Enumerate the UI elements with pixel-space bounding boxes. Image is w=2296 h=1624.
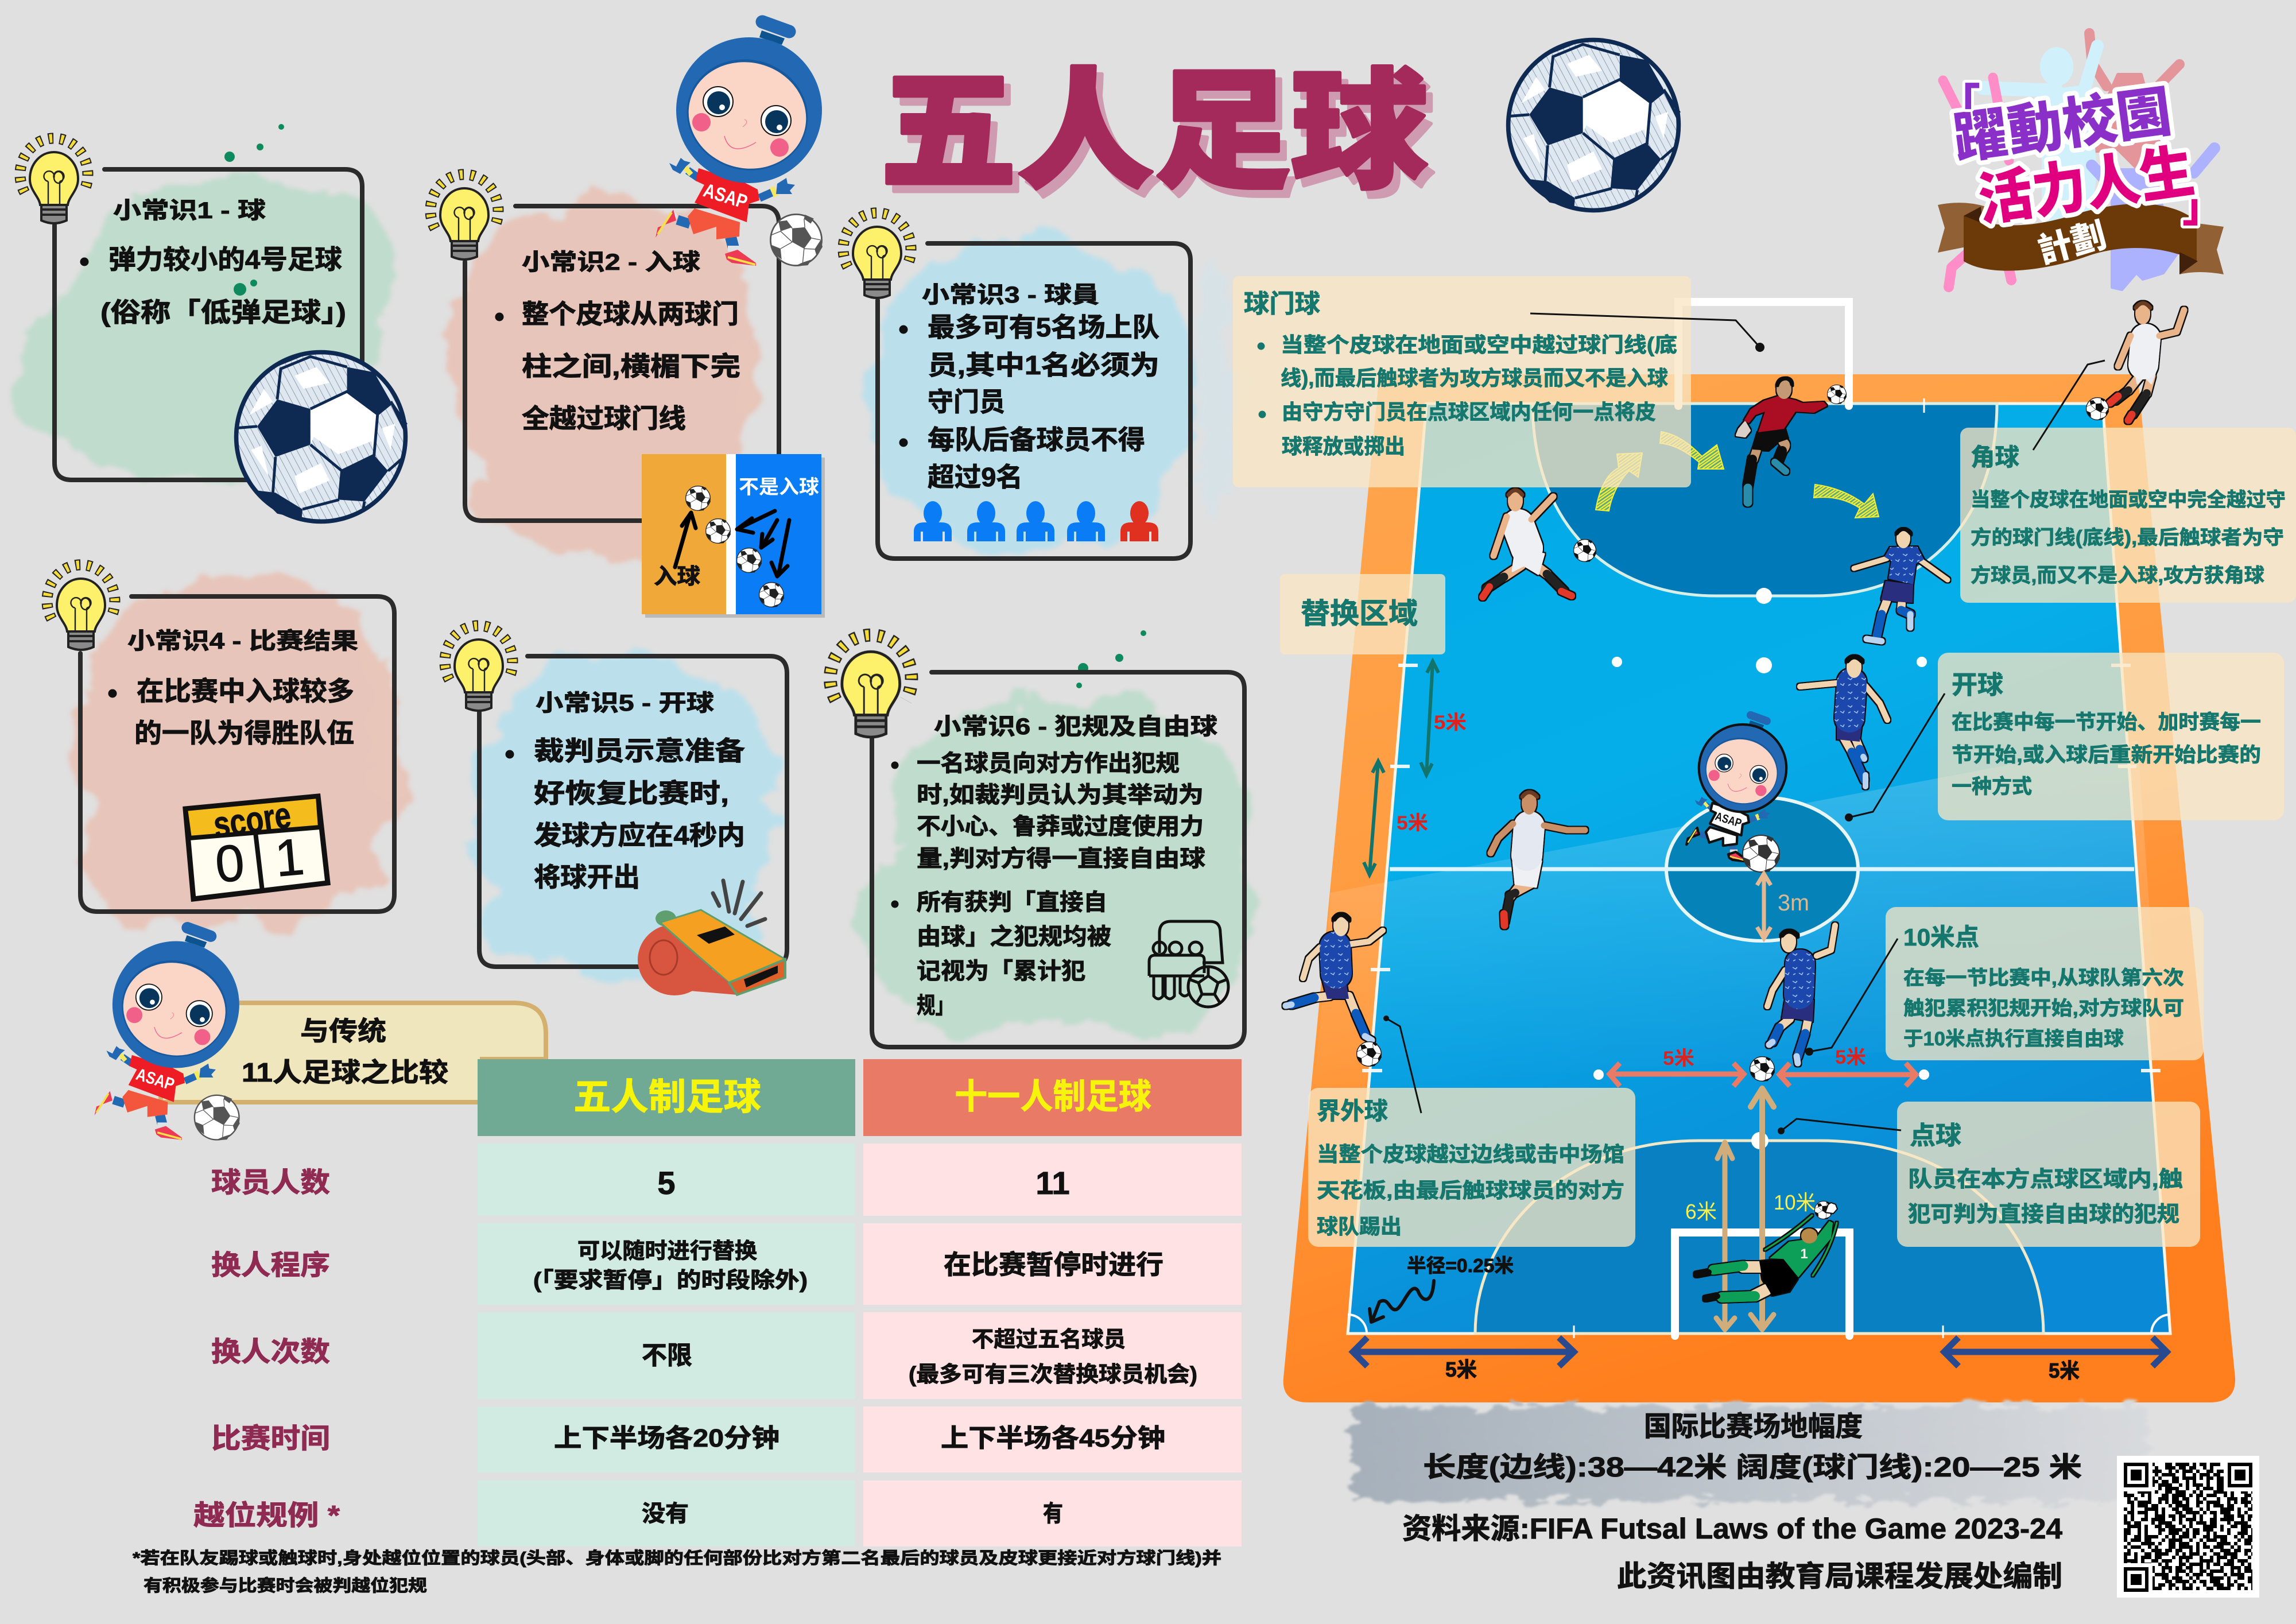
run-off surround [1283, 374, 2235, 1402]
bullet text: 好恢复比赛时, [534, 778, 729, 808]
comparison table [193, 1059, 1242, 1547]
leader line [1805, 939, 1898, 1056]
body text: 球释放或掷出 [1282, 435, 1405, 458]
icon: ball [770, 214, 823, 266]
player: white kit upper left [1483, 490, 1572, 597]
row: substitution procedure: 可以随时进行替换 [577, 1239, 757, 1263]
label: 3m: 3m [1778, 890, 1809, 916]
panel: goal kick [1233, 276, 1764, 487]
leader line [1530, 313, 1764, 352]
bullet text [899, 312, 1159, 492]
plan label: 計劃 [2034, 216, 2110, 270]
heading: 球门球 [1244, 290, 1320, 318]
body text [1258, 333, 1677, 458]
labels: 5 m zones [1397, 712, 1866, 1069]
source and credit: 资料来源:FIFA Futsal Laws of the Game 2023-24 [1402, 1513, 2062, 1545]
icon: light bulb [430, 175, 498, 259]
bullet text: 发球方应在4秒内 [534, 820, 745, 850]
bullet text: 在比赛中入球较多 [137, 676, 354, 706]
row: match time [211, 1406, 1242, 1472]
bullet text: (俗称「低弹足球」) [100, 297, 346, 327]
bullet text: 每队后备球员不得 [928, 425, 1145, 455]
programme name: 」 [2182, 185, 2224, 231]
arrows: 5 m base [1353, 1338, 2167, 1366]
icon: light bulb [830, 635, 912, 737]
pitch dimensions: 国际比赛场地幅度 [1644, 1412, 1863, 1442]
panel: penalty kick [1778, 1102, 2200, 1247]
player: blue kit left touchline [1286, 914, 1383, 1040]
bullet text: 整个皮球从两球门 [522, 299, 739, 329]
row: match time: 上下半场各20分钟 [554, 1424, 779, 1452]
body text [1317, 1142, 1624, 1238]
footnote: *若在队友踢球或触球时,身处越位位置的球员(头部、身体或脚的任何部份比对方第二名最后的球员及皮球更接近对方球门线)并 [133, 1549, 1221, 1568]
mascot: top: ASAP [701, 179, 750, 214]
icon: ball [1827, 385, 1847, 404]
panel: 小常识6 犯规及自由球 [830, 635, 1244, 1047]
heading: 角球 [1971, 444, 2019, 471]
icon: free kick wall [1149, 921, 1228, 1007]
panel: 小常识4 比赛结果 [47, 565, 394, 912]
icon: scoreboard [185, 794, 328, 899]
heading: 小常识6 - 犯规及自由球 [934, 714, 1217, 739]
leader line [1845, 693, 1945, 821]
row: substitution count [211, 1312, 1242, 1399]
body text: 犯可判为直接自由球的犯规 [1908, 1203, 2179, 1227]
leader line [1778, 1119, 1901, 1134]
body text [1952, 711, 2261, 798]
icon: ball [1814, 1201, 1833, 1219]
futsal pitch [1283, 302, 2235, 1402]
mascot: centre circle: ASAP [1713, 810, 1743, 830]
footnote [133, 1549, 1221, 1595]
icon: scoreboard: score [211, 794, 293, 846]
arrow: 3m [1757, 874, 1771, 939]
centre circle [1666, 797, 1858, 941]
icon: football [235, 351, 406, 522]
panel: corner kick [1960, 361, 2296, 603]
labels: 5 m base [1445, 1358, 2080, 1382]
row: substitution count: 不超过五名球员 [972, 1328, 1126, 1352]
icon: light bulb [843, 213, 911, 298]
body text: 一种方式 [1952, 776, 2032, 798]
body text: 当整个皮球在地面或空中完全越过守 [1971, 489, 2286, 511]
bullet text: 不小心、鲁莽或过度使用力 [917, 814, 1204, 839]
body text [1971, 489, 2286, 587]
labels: 5 m zones: 5米 [1663, 1048, 1694, 1069]
bullet text: 员,其中1名必须为 [928, 350, 1159, 380]
icons: five players [914, 501, 1158, 541]
sheen [1314, 741, 2158, 1091]
row: substitution count: 换人次数 [211, 1337, 330, 1367]
ribbon: comparison heading [161, 1003, 546, 1102]
body text: 由守方守门员在点球区域内任何一点将皮 [1282, 400, 1656, 424]
labels: 10 m and 6 m: 10米 [1774, 1191, 1816, 1214]
bullet text: 一名球员向对方作出犯规 [917, 751, 1180, 776]
mascot: centre circle [1686, 715, 1786, 862]
programme name: 活力人生 [1974, 139, 2198, 233]
arrows: substitution zone [1364, 661, 1438, 875]
programme name: 躍動校園 [1950, 81, 2175, 170]
brush background [1352, 1406, 2147, 1501]
labels: 5 m base: 5米 [2049, 1359, 2080, 1382]
pitch markings [1348, 398, 2170, 1338]
panel: 小常识2 入球 [430, 175, 825, 618]
arrows: 5 m from 10 m spot [1609, 1063, 1916, 1086]
playing court [1348, 404, 2170, 1334]
row: players: 5 [657, 1165, 676, 1201]
row: substitution count: (最多可有三次替换球员机会) [909, 1363, 1197, 1387]
row: offside [193, 1480, 1242, 1547]
heading text [242, 1016, 448, 1087]
icon: ball [1743, 835, 1780, 873]
icon: scoreboard: 1 [273, 828, 307, 888]
labels: 5 m zones: 5米 [1434, 712, 1467, 734]
panel: substitution zone: 替换区域 [1301, 598, 1418, 630]
heading: 点球 [1910, 1122, 1961, 1150]
body text: 在每一节比赛中,从球队第六次 [1903, 967, 2184, 989]
bullet text: 裁判员示意准备 [534, 736, 745, 766]
footnote: 有积极参与比赛时会被判越位犯规 [144, 1576, 427, 1595]
heading: 10米点 [1903, 924, 1979, 951]
bullet text: 规」 [917, 993, 954, 1018]
bullet text: 守门员 [928, 387, 1005, 417]
row: players [211, 1144, 1242, 1216]
programme name: 「 [1939, 82, 1980, 127]
row: match time: 上下半场各45分钟 [941, 1424, 1165, 1452]
labels: 5 m zones: 5米 [1835, 1047, 1866, 1068]
icon: ball [1356, 1041, 1382, 1067]
bottom penalty area [1475, 1141, 2043, 1334]
header: eleven-a-side: 十一人制足球 [955, 1078, 1151, 1116]
yellow pass arrows [1596, 432, 1879, 518]
header: futsal [478, 1059, 855, 1136]
bullet text: 记视为「累计犯 [917, 959, 1085, 984]
header: eleven-a-side [863, 1059, 1242, 1136]
icon: scoreboard: 0 [213, 834, 247, 894]
watercolor backgrounds [14, 172, 1251, 1039]
body text [1903, 967, 2184, 1050]
pitch dimensions [1423, 1412, 2082, 1483]
panel: 小常识3 球员 [843, 213, 1190, 559]
labels: 5 m base: 5米 [1445, 1358, 1477, 1381]
row: substitution procedure: 换人程序 [211, 1250, 330, 1281]
row: substitution procedure: 在比赛暂停时进行 [944, 1250, 1163, 1280]
bullet text: 超过9名 [928, 462, 1023, 492]
arrows: 10 m and 6 m lower [1716, 1142, 1774, 1330]
body text: 方的球门线(底线),最后触球者为守 [1971, 527, 2284, 549]
player: goalkeeper diving [1697, 1215, 1837, 1299]
row: match time: 比赛时间 [211, 1424, 330, 1454]
bullet text: 时,如裁判员认为其举动为 [917, 782, 1204, 808]
player: blue kit centre bottom [1767, 925, 1835, 1063]
silhouettes [1943, 33, 2214, 290]
heading: 小常识2 - 入球 [522, 250, 700, 275]
icon: whistle [638, 881, 785, 995]
player: goalkeeper red [1737, 379, 1827, 502]
bullet text: 由球」之犯规均被 [917, 924, 1111, 949]
icon: light bulb [47, 565, 115, 650]
labels: 5 m zones: 5米 [1397, 812, 1428, 834]
bullet text: 柱之间,横楣下完 [522, 351, 740, 381]
row: offside: 越位规例 * [193, 1501, 340, 1531]
body text: 线),而最后触球者为攻方球员而又不是入球 [1281, 366, 1668, 390]
row: players: 11 [1035, 1165, 1070, 1201]
mascot: top [656, 22, 823, 266]
row: players: 球员人数 [211, 1168, 330, 1198]
row: offside: 有 [1043, 1501, 1063, 1526]
bottom goal [1675, 1232, 1849, 1336]
bullet text: 所有获判「直接自 [917, 890, 1107, 915]
heading: 开球 [1952, 671, 2003, 699]
player: blue kit upper right [1854, 529, 1948, 641]
body text: 球队踢出 [1317, 1215, 1402, 1238]
row: substitution count: 不限 [642, 1342, 692, 1370]
bullet text: 弹力较小的4号足球 [108, 245, 342, 274]
bullet text [80, 245, 346, 327]
pitch dimensions: 长度(边线):38—42米 阔度(球门线):20—25 米 [1423, 1452, 2082, 1483]
icon: ball [2086, 397, 2109, 420]
player: blue kit centre right [1800, 656, 1887, 786]
body text: 天花板,由最后触球球员的对方 [1317, 1179, 1624, 1202]
title: 五人足球 [887, 67, 1435, 212]
source and credit [1402, 1513, 2062, 1592]
panel: 小常识1 球 [20, 138, 406, 522]
panel: 10 m spot [1805, 907, 2204, 1060]
player: white kit top right [2110, 303, 2184, 420]
bullet text [506, 736, 745, 892]
bullet text [891, 751, 1205, 1018]
measurements [1353, 661, 2167, 1382]
body text: 方球员,而又不是入球,攻方获角球 [1971, 565, 2264, 587]
icon: title football [1507, 39, 1680, 211]
diagram: goal line: 不是入球 [739, 476, 819, 498]
heading text: 11人足球之比较 [242, 1057, 448, 1087]
icon: ball on 10 m spot [1750, 1056, 1775, 1082]
top goal [1678, 302, 1849, 406]
label: corner arc radius: 半径=0.25米 [1407, 1255, 1514, 1276]
ink dots [224, 124, 1146, 688]
bullet text: 的一队为得胜队伍 [134, 718, 354, 748]
body text: 于10米点执行直接自由球 [1903, 1028, 2124, 1050]
bullet text [108, 676, 354, 748]
body text: 在比赛中每一节开始、加时赛每一 [1952, 711, 2261, 734]
icon: ball [194, 1095, 240, 1141]
heading text: 与传统 [300, 1016, 386, 1046]
arrow: squiggle [1370, 1281, 1434, 1322]
body text: 节开始,或入球后重新开始比赛的 [1952, 744, 2261, 766]
panel: substitution zone [1280, 574, 1445, 654]
panel: kick-off [1845, 653, 2284, 821]
player: white kit centre left [1491, 792, 1585, 925]
arrows: 10 m and 6 m [1751, 1088, 1774, 1327]
header: futsal: 五人制足球 [573, 1076, 761, 1118]
bullet text: 量,判对方得一直接自由球 [917, 846, 1205, 871]
icon: light bulb [445, 626, 513, 711]
QR code [2117, 1456, 2259, 1598]
halfway line [1390, 867, 2134, 871]
body text: 当整个皮球在地面或空中越过球门线(底 [1281, 333, 1677, 356]
logo: campus programme [1938, 33, 2224, 290]
icon: goalkeeper glove [1825, 1203, 1837, 1214]
title: 五人足球 [880, 59, 1428, 204]
mascot: comparison: ASAP [134, 1065, 177, 1094]
bullet text: 全越过球门线 [522, 404, 686, 433]
body text: 当整个皮球越过边线或击中场馆 [1317, 1142, 1624, 1166]
body text [1908, 1168, 2183, 1227]
bullet text: 将球开出 [534, 862, 640, 892]
heading: 小常识1 - 球 [113, 198, 266, 223]
heading: 小常识5 - 开球 [536, 691, 714, 716]
icon: light bulb [20, 138, 88, 223]
heading: 界外球 [1317, 1098, 1388, 1125]
row: substitution procedure: (「要求暂停」的时段除外) [533, 1269, 808, 1293]
label: shirt number: 1 [1800, 1246, 1808, 1262]
body text: 触犯累积犯规开始,对方球队可 [1903, 998, 2184, 1020]
leader line [1383, 1016, 1421, 1113]
leader line [2033, 361, 2105, 450]
bullet text: 最多可有5名场上队 [928, 312, 1159, 342]
diagram: goal line: 入球 [654, 565, 700, 589]
mascot: comparison [95, 928, 240, 1141]
icon: ball [1573, 539, 1596, 562]
panel: 小常识5 开球 [445, 626, 787, 995]
heading: 小常识3 - 球員 [922, 282, 1099, 308]
labels: 10 m and 6 m: 6米 [1685, 1200, 1717, 1223]
row: substitution procedure [211, 1223, 1242, 1305]
row: offside: 没有 [642, 1501, 689, 1526]
diagram: goal line [642, 454, 825, 618]
body text: 队员在本方点球区域内,触 [1908, 1168, 2183, 1192]
heading: 小常识4 - 比赛结果 [127, 629, 358, 654]
programme name [1939, 81, 2224, 233]
labels: 10 m and 6 m [1685, 1191, 1816, 1223]
panel: throw-in [1308, 1016, 1635, 1247]
source and credit: 此资讯图由教育局课程发展处编制 [1617, 1560, 2062, 1592]
bullet text [495, 299, 740, 433]
ribbon tails [1938, 203, 2224, 274]
top penalty area [1533, 404, 1997, 596]
